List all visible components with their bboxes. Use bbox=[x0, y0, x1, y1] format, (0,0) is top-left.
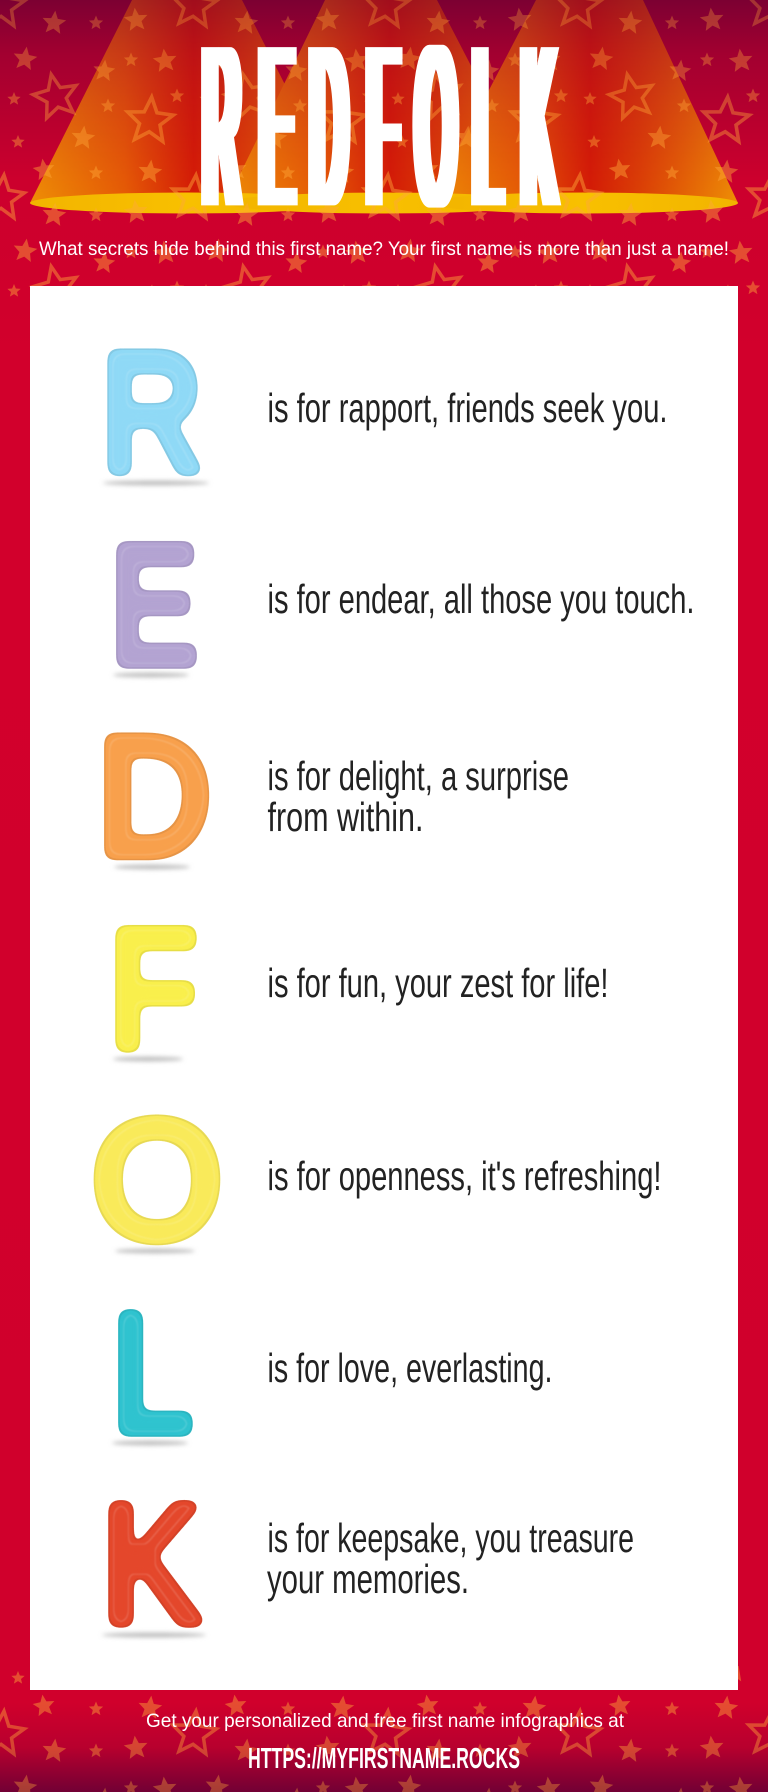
icon: letter K: K bbox=[102, 1471, 200, 1657]
icon: letter E: E bbox=[111, 511, 197, 698]
text: D second line: from within. bbox=[268, 794, 424, 840]
text: L line: is for love, everlasting. bbox=[268, 1345, 552, 1391]
footer url: HTTPS://MYFIRSTNAME.ROCKS bbox=[248, 1743, 520, 1775]
icon: letter D: D bbox=[98, 704, 210, 890]
text: F line: is for fun, your zest for life! bbox=[268, 960, 608, 1006]
subtitle: What secrets hide behind this first name? Your first name is more than just a name! bbox=[39, 238, 729, 260]
text: K second line: your memories. bbox=[267, 1556, 469, 1602]
icon: letter L: L bbox=[112, 1280, 192, 1465]
spotlights bbox=[30, 0, 738, 214]
title: REDFOLK bbox=[204, 0, 555, 255]
icon: letter O: O bbox=[92, 1088, 222, 1273]
icon: letter F: F bbox=[109, 896, 197, 1081]
icon: letter R: R bbox=[102, 320, 202, 505]
text: D lines: is for delight, a surprise bbox=[268, 753, 569, 799]
panel: white card bbox=[30, 286, 738, 1690]
footer text: Get your personalized and free first name infographics at bbox=[146, 1710, 625, 1732]
